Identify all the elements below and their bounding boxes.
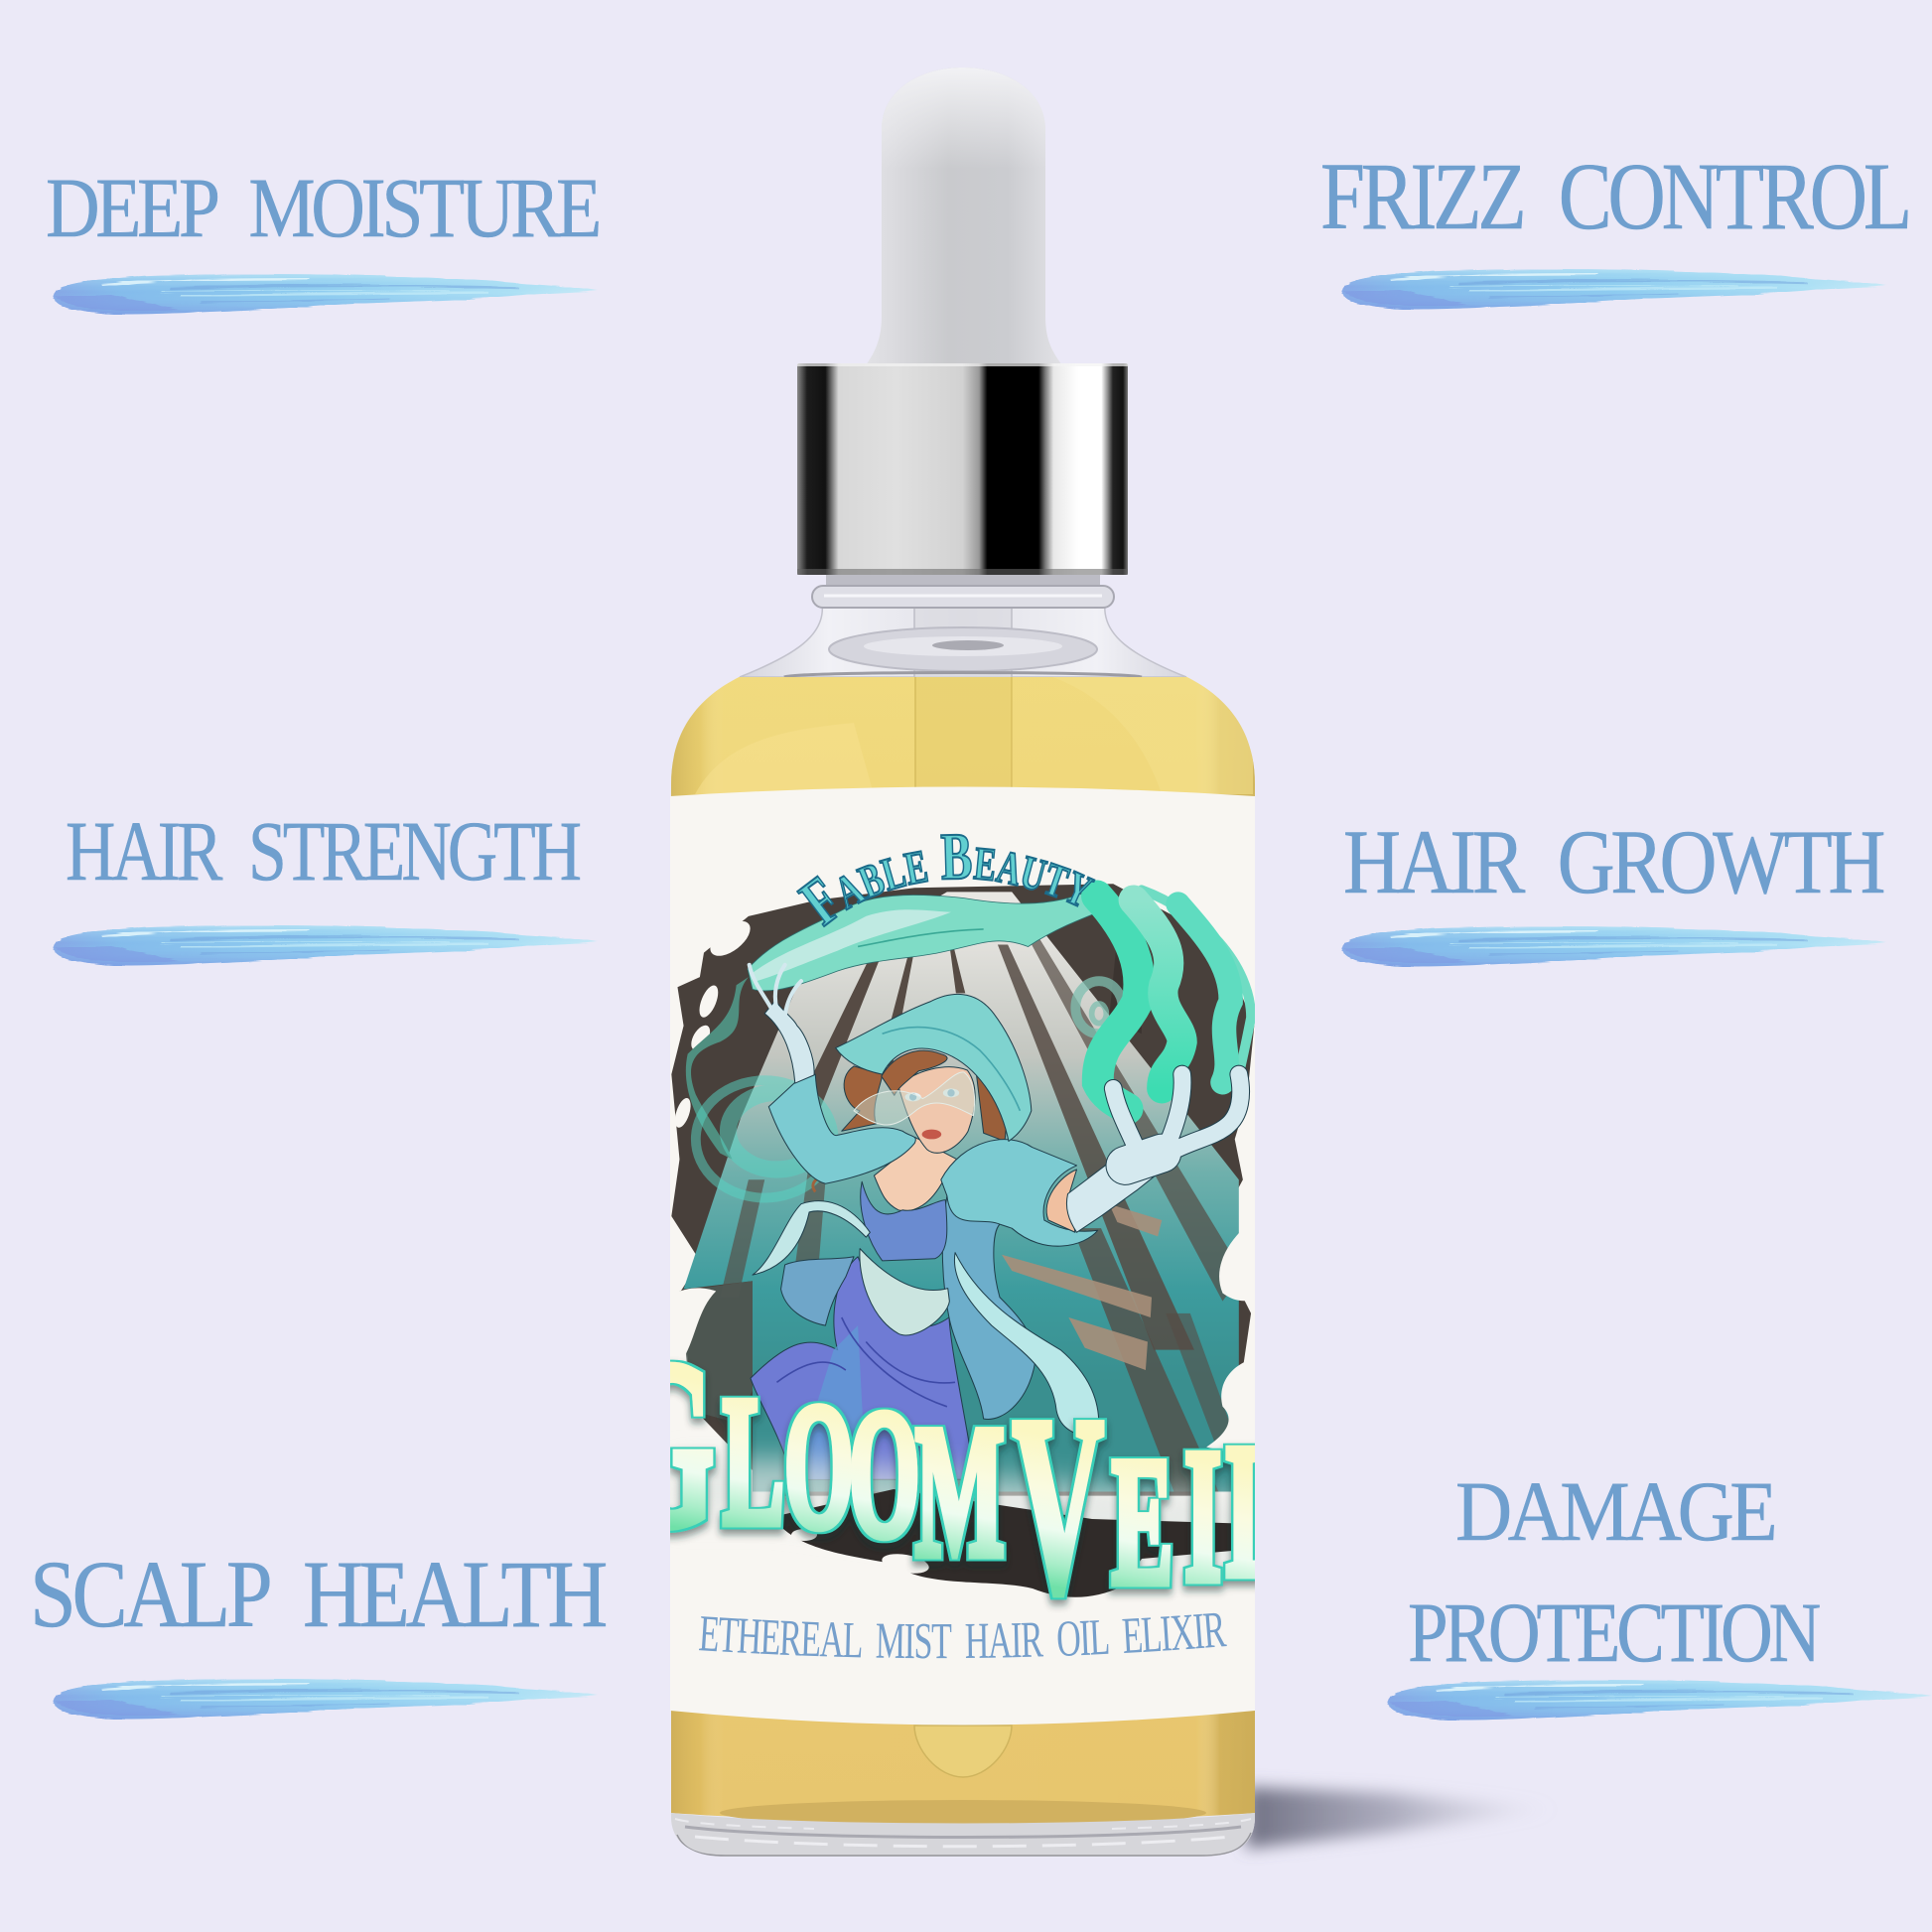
product title: O	[784, 1366, 854, 1565]
brush stroke	[54, 1679, 598, 1720]
brush stroke	[1342, 926, 1886, 967]
benefit: scalp health	[30, 1541, 606, 1720]
brush stroke	[54, 274, 598, 315]
stair treads	[1002, 1204, 1162, 1370]
product title: L	[1226, 1405, 1290, 1616]
product title: I	[1184, 1410, 1221, 1621]
dark gaps between beams	[720, 936, 1243, 1492]
label illustration	[670, 880, 1255, 1610]
product title: M	[915, 1388, 1005, 1596]
product descriptor: ETHEREAL MIST HAIR OIL ELIXIR	[699, 1612, 1227, 1658]
artwork upper zone	[671, 884, 1259, 1496]
haze behind title	[671, 1459, 1255, 1569]
dropper tip in oil	[914, 1725, 1012, 1777]
left mist spiral	[696, 1080, 834, 1198]
backdrop white holes	[672, 914, 757, 1130]
loose sash left	[753, 1201, 870, 1275]
product title: G	[621, 1312, 714, 1577]
skirt	[751, 1257, 975, 1479]
raised left sleeve	[768, 1074, 915, 1183]
benefit: hair strength	[54, 803, 598, 966]
waist sash	[860, 1249, 949, 1335]
brand name arched: Fable Beauty	[796, 834, 1096, 927]
benefit: damage protection: PROTECTION	[1408, 1585, 1820, 1680]
ground holes	[791, 1529, 930, 1577]
product title: O	[849, 1373, 920, 1575]
light rays on skirt	[808, 1326, 863, 1479]
product descriptor	[699, 1612, 1227, 1658]
right shoulder and sleeve	[941, 1140, 1098, 1246]
benefit: hair growth	[1342, 811, 1886, 967]
right hand fingers	[1113, 1074, 1241, 1166]
benefit: damage protection: DAMAGE	[1455, 1463, 1774, 1559]
product title: E	[1112, 1421, 1173, 1622]
right mist spiral	[1075, 981, 1123, 1034]
benefit: deep moisture: DEEP MOISTURE	[46, 160, 599, 255]
benefit: scalp health: SCALP HEALTH	[30, 1541, 606, 1647]
hair front	[882, 1050, 947, 1095]
robe body	[942, 1196, 1036, 1419]
oil liquid	[671, 677, 1255, 1862]
right glove forearm	[1066, 1160, 1158, 1232]
hood fold	[883, 1028, 1020, 1111]
bottle cast shadow	[1246, 1787, 1561, 1849]
benefit: damage protection	[1388, 1463, 1932, 1721]
benefit: deep moisture	[46, 160, 599, 315]
veil	[854, 1072, 975, 1125]
product title: L	[723, 1358, 784, 1563]
fan of light beams	[684, 892, 1239, 1492]
silver collar	[797, 363, 1128, 575]
glass bottle body	[671, 575, 1255, 1857]
bare arm	[1046, 1170, 1077, 1232]
brush stroke	[1388, 1680, 1932, 1721]
brush stroke	[1342, 269, 1886, 310]
paper label with illustration	[670, 786, 1255, 1725]
label background	[670, 786, 1255, 1725]
mist arc overhead	[747, 894, 1092, 991]
hood	[836, 994, 1032, 1141]
face details	[904, 1088, 959, 1139]
benefit: frizz control	[1320, 143, 1908, 310]
flowing robe tail	[954, 1253, 1099, 1439]
product title: V	[1013, 1366, 1104, 1645]
left fading mist strand	[686, 977, 749, 1160]
chest and neck	[874, 1137, 957, 1211]
mist cascades right	[1097, 890, 1251, 1109]
product bottle	[671, 68, 1255, 1862]
bodice	[861, 1181, 947, 1261]
left glove	[764, 1001, 814, 1083]
hair back	[842, 1066, 883, 1131]
torn dark backdrop	[671, 884, 1254, 1496]
lower left smoke	[679, 1281, 753, 1423]
face	[898, 1067, 975, 1153]
benefit: hair strength: HAIR STRENGTH	[66, 803, 580, 898]
right side paper cut-outs	[679, 1233, 1245, 1451]
product title	[621, 1312, 1290, 1645]
hip drape	[781, 1257, 854, 1325]
dropper bulb	[866, 68, 1062, 365]
brush stroke	[54, 925, 598, 966]
dark ground under title	[772, 1489, 1255, 1597]
heroine figure	[750, 965, 1241, 1479]
